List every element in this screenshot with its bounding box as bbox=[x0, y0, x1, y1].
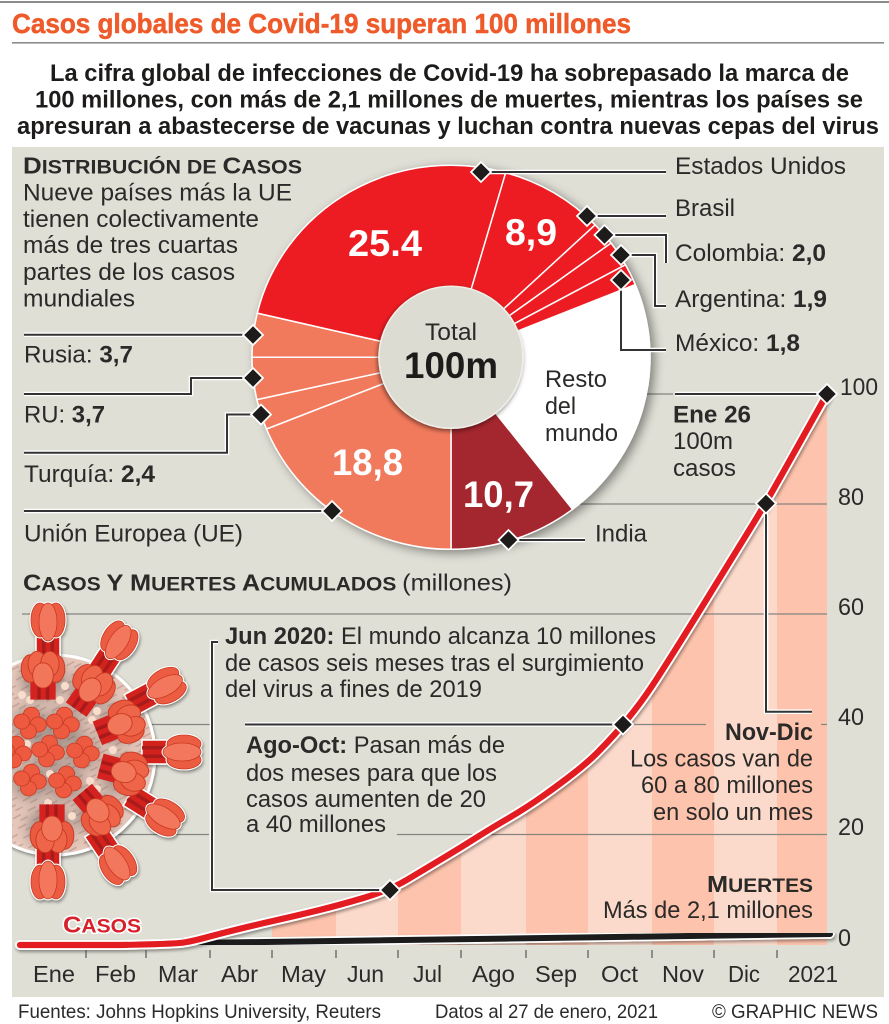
cases curve bbox=[20, 394, 827, 945]
annotation: Jun 2020: del virus a fines de 2019 bbox=[225, 676, 482, 703]
label: Muertes: MUERTES bbox=[707, 871, 813, 897]
annotation: Ene 26: casos bbox=[673, 455, 736, 482]
resto del mundo label: mundo bbox=[545, 420, 618, 447]
footer: credit: © GRAPHIC NEWS bbox=[712, 1001, 878, 1023]
value: India: 10,7 bbox=[463, 474, 534, 515]
label: RU: RU: 3,7 bbox=[24, 402, 105, 429]
annotation: Jun 2020: de casos seis meses tras el surgimiento bbox=[225, 650, 644, 677]
value: Unión Europea: 18,8 bbox=[332, 442, 403, 483]
chart stripes under the curve bbox=[272, 380, 827, 946]
section text: distribution of cases: DISTRIBUCIÓN DE CASOS bbox=[23, 152, 302, 178]
grid lines bbox=[22, 394, 827, 834]
x axis month labels: Jun bbox=[347, 961, 384, 987]
y axis labels: 20 bbox=[838, 814, 864, 841]
annotation: Nov-Dic: Nov-Dic bbox=[725, 719, 813, 746]
label: Colombia: Colombia: 2,0 bbox=[675, 240, 826, 267]
footer: sources: Fuentes: Johns Hopkins University, Reuters bbox=[18, 1001, 381, 1023]
intro text: La cifra global de infecciones de Covid-19 ha sobrepasado la marca de bbox=[50, 60, 849, 87]
section text: distribution of cases: tienen colectivamente bbox=[23, 206, 259, 233]
annotation: Nov-Dic: en solo un mes bbox=[653, 799, 813, 826]
y axis labels: 60 bbox=[838, 594, 864, 621]
total label: Total bbox=[425, 319, 477, 346]
annotation: Nov-Dic bbox=[630, 719, 813, 826]
section text: distribution of cases: mundiales bbox=[23, 286, 135, 313]
title rule bbox=[12, 42, 884, 44]
x axis month labels: 2021 bbox=[788, 961, 838, 987]
label: Turquía: Turquía: 2,4 bbox=[24, 461, 156, 488]
intro text: apresuran a abastecerse de vacunas y luchan contra nuevas cepas del virus bbox=[17, 113, 879, 140]
label: Argentina: Argentina: 1,9 bbox=[675, 286, 827, 313]
annotation: Ago-Oct: Ago-Oct: Pasan más de bbox=[246, 732, 505, 759]
annotation: Ene 26: Ene 26 bbox=[673, 402, 751, 429]
label: Unión Europea: Unión Europea (UE) bbox=[24, 521, 243, 548]
annotation: Nov-Dic: 60 a 80 millones bbox=[641, 772, 813, 799]
x axis month labels: Ene bbox=[33, 961, 75, 987]
donut centre bbox=[379, 286, 523, 428]
label: Muertes: Más de 2,1 millones bbox=[603, 897, 813, 924]
y axis labels: 40 bbox=[838, 704, 864, 731]
y axis labels: 0 bbox=[838, 925, 851, 952]
top rule bbox=[0, 1, 889, 3]
donut chart: case distribution bbox=[252, 165, 650, 549]
annotation: Ago-Oct: a 40 millones bbox=[246, 811, 386, 838]
section text: distribution of cases: partes de los casos bbox=[23, 259, 235, 286]
chart heading: CASOS Y MUERTES ACUMULADOS (millones) bbox=[23, 570, 512, 596]
label: Casos: CASOS bbox=[63, 911, 141, 937]
resto del mundo label: Resto bbox=[545, 366, 607, 393]
total value: 100m bbox=[404, 345, 498, 386]
intro text: 100 millones, con más de 2,1 millones de muertes, mientras los países se bbox=[35, 86, 863, 114]
resto del mundo label bbox=[545, 366, 618, 447]
label: Estados Unidos: Estados Unidos bbox=[675, 153, 846, 180]
annotation: Ene 26: 100m bbox=[673, 428, 733, 455]
x axis month labels: Nov bbox=[662, 961, 704, 987]
annotation: Jun 2020: Jun 2020: El mundo alcanza 10 millones bbox=[225, 623, 656, 650]
section text: distribution of cases bbox=[23, 152, 302, 313]
x axis month labels: Jul bbox=[413, 961, 442, 987]
x axis month labels bbox=[33, 961, 838, 987]
label: India: India bbox=[595, 521, 648, 548]
annotation: Ago-Oct: casos aumenten de 20 bbox=[246, 786, 486, 813]
section text: distribution of cases: más de tres cuartas bbox=[23, 232, 238, 259]
label: México: México: 1,8 bbox=[675, 330, 800, 357]
annotation leader lines bbox=[212, 394, 827, 890]
annotation: Ago-Oct bbox=[246, 732, 505, 838]
x axis month labels: Mar bbox=[158, 961, 198, 987]
deaths line bbox=[193, 934, 830, 943]
icon: coronavirus illustration bbox=[0, 602, 202, 900]
diamonds: curve markers bbox=[380, 384, 837, 900]
resto del mundo label: del bbox=[545, 393, 576, 420]
x axis month labels: May bbox=[281, 961, 326, 987]
y axis labels bbox=[838, 374, 878, 952]
x axis month labels: Dic bbox=[728, 961, 760, 987]
x axis month labels: Ago bbox=[472, 961, 515, 987]
value: Brasil: 8,9 bbox=[505, 212, 557, 253]
section text: distribution of cases: Nueve países más la UE bbox=[23, 180, 292, 207]
y axis labels: 100 bbox=[840, 374, 878, 401]
x axis month labels: Sep bbox=[535, 961, 577, 987]
title: Casos globales de Covid-19 superan 100 millones bbox=[12, 8, 631, 39]
annotation: Jun 2020 bbox=[225, 623, 656, 703]
value: Estados Unidos: 25.4 bbox=[348, 223, 422, 264]
label: Muertes bbox=[603, 871, 813, 924]
annotation: Ago-Oct: dos meses para que los bbox=[246, 760, 497, 787]
annotation: Ene 26 bbox=[673, 402, 751, 482]
x axis month labels: Oct bbox=[601, 961, 638, 987]
x axis month labels: Feb bbox=[95, 961, 136, 987]
label: Brasil: Brasil bbox=[675, 195, 735, 222]
y axis labels: 80 bbox=[838, 484, 864, 511]
x axis month labels: Abr bbox=[221, 961, 258, 987]
donut wedges bbox=[252, 165, 650, 549]
x axis ticks bbox=[86, 950, 777, 958]
intro text bbox=[17, 60, 879, 140]
label: Rusia: Rusia: 3,7 bbox=[24, 342, 133, 369]
annotation: Nov-Dic: Los casos van de bbox=[630, 746, 813, 773]
leader lines: donut bbox=[24, 172, 666, 540]
diamonds: donut markers bbox=[243, 162, 631, 550]
footer: date: Datos al 27 de enero, 2021 bbox=[435, 1001, 658, 1023]
